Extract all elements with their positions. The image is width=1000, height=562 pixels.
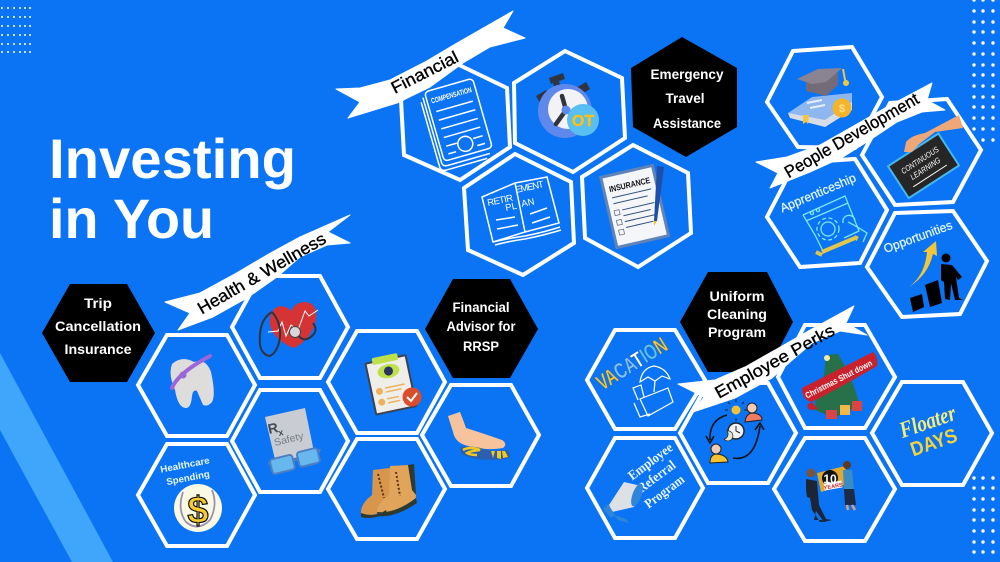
hexagon: healthcare spending: Spending: [165, 469, 211, 488]
hexagon: retirement plan: RETIR: [486, 193, 514, 209]
banner: financial: Financial: [388, 48, 462, 98]
hexagon: opportunities: Opportunities: [882, 218, 954, 256]
hexagon: employee referral program: Employee: [625, 440, 676, 483]
hexagon: trip cancellation insurance: [42, 284, 155, 382]
hexagon: uniform cleaning program: Cleaning: [707, 307, 767, 322]
hexagon: emergency travel assistance: [631, 37, 737, 157]
panel: financial: [336, 11, 737, 275]
panel: employee perks: [587, 272, 992, 541]
hexagon: overtime stopwatch: OT: [572, 113, 594, 130]
hexagon: ten years service award: 10: [823, 472, 837, 486]
banner: people development: People Development: [781, 89, 923, 182]
hexagon: floater days: [872, 382, 992, 485]
banner: health and wellness: Health & Wellness: [194, 229, 329, 318]
diagonal light blue band: [0, 353, 113, 562]
hexagon: apprenticeship: Apprenticeship: [778, 171, 858, 215]
hexagon: uniform cleaning program: Uniform: [710, 289, 764, 304]
hexagon: dental tooth: [138, 335, 255, 436]
hexagon: financial advisor for RRSP: [425, 279, 538, 378]
hexagon: retirement plan: [464, 154, 574, 275]
hexagon: vision safety glasses: R: [266, 419, 280, 437]
banner: employee perks: Employee Perks: [712, 321, 838, 402]
hexagon: floater days: Floater: [895, 400, 960, 443]
dot pattern top right: [972, 0, 995, 142]
panel: health and wellness: [42, 215, 539, 546]
banner: health and wellness: [165, 215, 350, 330]
hexagon: overtime stopwatch: [514, 51, 625, 172]
hexagon: christmas shut down: Christmas Shut down: [803, 358, 874, 400]
banner: employee perks: [678, 306, 867, 412]
hexagon: continuous learning: LEARNING: [909, 156, 942, 182]
hexagon: insurance document: [582, 145, 691, 267]
banner: financial: [336, 11, 525, 118]
hexagon: apprenticeship: [767, 159, 887, 267]
hexagon: healthcare spending: [138, 444, 255, 546]
hexagon: retirement plan: PL: [504, 201, 518, 214]
hexagon: vision safety glasses: Safety: [273, 431, 305, 449]
hexagon: healthcare spending: $: [187, 490, 209, 532]
hexagon: trip cancellation insurance: Trip: [84, 296, 112, 311]
hexagon: vacation: VACATION: [592, 332, 672, 395]
hexagon: ten years service award: YEARS: [823, 482, 844, 492]
hexagon: continuous learning: CONTINUOUS: [900, 145, 941, 176]
hexagon: emergency travel assistance: Travel: [666, 91, 704, 106]
hexagon: education scholarship: $: [839, 103, 845, 115]
hexagon: emergency travel assistance: Emergency: [650, 67, 724, 82]
hexagon: floater days: DAYS: [908, 425, 960, 461]
hexagon: vision safety glasses: [232, 390, 348, 492]
hexagon: education scholarship: [767, 47, 882, 148]
dot pattern bottom right: [972, 476, 995, 554]
hexagon: retirement plan: AN: [520, 196, 536, 210]
hexagon: healthcare spending: Healthcare: [160, 455, 211, 476]
title: Investing: [49, 127, 296, 190]
hexagon: financial advisor for RRSP: Financial: [452, 300, 510, 315]
hexagon: trip cancellation insurance: Insurance: [64, 342, 132, 357]
hexagon: ten years service award: [774, 438, 895, 541]
hexagon: opportunities: [867, 211, 987, 317]
dot pattern top left: [1, 7, 31, 53]
hexagon: employee referral program: [587, 438, 703, 538]
hexagon: compensation: COMPENSATION: [430, 85, 473, 105]
hexagon: orthotics foot: [422, 385, 539, 486]
hexagon: christmas shut down: [778, 325, 895, 428]
hexagon: employee referral program: Referral: [634, 457, 679, 496]
hexagon: retirement plan: EMENT: [514, 179, 545, 196]
hexagon: flexible hours clock: [680, 383, 796, 483]
hexagon: continuous learning: [862, 99, 981, 205]
hexagon: employee referral program: Program: [641, 471, 688, 511]
hexagon: vacation: [587, 330, 705, 429]
title: [49, 127, 296, 250]
hexagon: safety boots: [328, 439, 445, 539]
hexagon: uniform cleaning program: Program: [708, 325, 766, 340]
hexagon: trip cancellation insurance: Cancellation: [55, 319, 141, 334]
hexagon: uniform cleaning program: [680, 272, 793, 372]
hexagon: eye care checklist: [328, 331, 445, 433]
hexagon: heart with stethoscope: [232, 276, 348, 378]
hexagon: financial advisor for RRSP: RRSP: [463, 339, 499, 354]
title: in You: [49, 187, 214, 250]
hexagon: insurance document: INSURANCE: [608, 175, 651, 194]
hexagon: financial advisor for RRSP: Advisor for: [446, 319, 516, 334]
hexagon: vision safety glasses: x: [277, 427, 284, 438]
panel: people development: [756, 47, 987, 317]
hexagon: emergency travel assistance: Assistance: [653, 116, 721, 131]
hexagon: compensation: [401, 63, 510, 180]
